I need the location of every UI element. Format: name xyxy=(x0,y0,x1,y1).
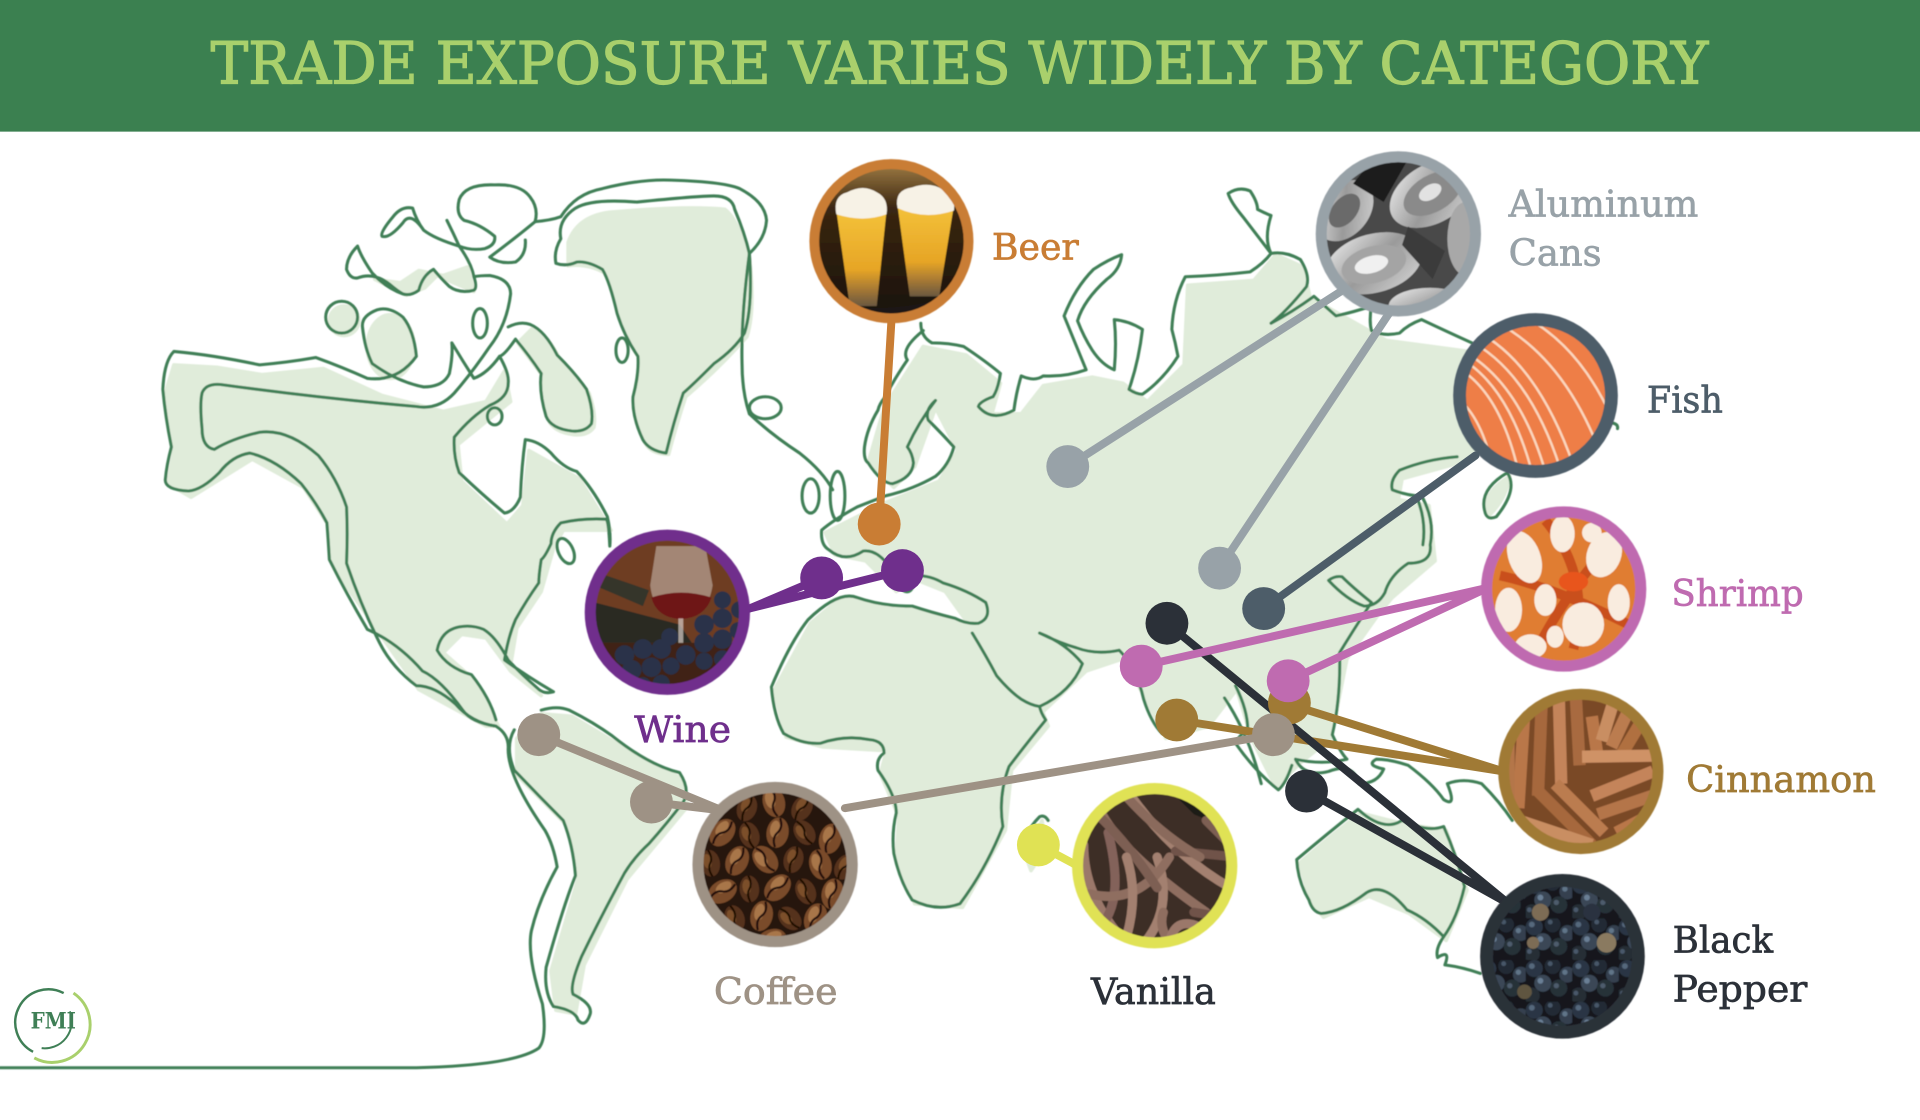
label: aluminum cans: Aluminum xyxy=(1508,183,1698,226)
coastline line xyxy=(0,180,1618,1068)
label: wine: Wine xyxy=(634,708,731,751)
label: black pepper xyxy=(1673,919,1808,1011)
label: black pepper: Pepper xyxy=(1673,968,1808,1011)
header banner xyxy=(0,0,1920,132)
label: cinnamon: Cinnamon xyxy=(1686,758,1876,801)
icon: black pepper xyxy=(1479,874,1646,1041)
label: aluminum cans: Cans xyxy=(1509,232,1602,275)
icon: vanilla xyxy=(1073,784,1237,949)
label: shrimp: Shrimp xyxy=(1671,572,1804,615)
icon: fish xyxy=(1453,313,1618,478)
label: beer: Beer xyxy=(992,226,1079,269)
icon: aluminum cans xyxy=(1315,150,1482,317)
label: vanilla: Vanilla xyxy=(1090,970,1216,1013)
logo: FMI: FMI xyxy=(31,1009,76,1035)
land fill xyxy=(165,208,1521,1014)
logo: FMI xyxy=(15,989,90,1062)
label: fish: Fish xyxy=(1647,379,1723,422)
label: black pepper: Black xyxy=(1673,919,1774,962)
icon: cinnamon xyxy=(1499,689,1663,853)
label: coffee: Coffee xyxy=(714,970,838,1013)
location dots xyxy=(517,445,1328,866)
title: TRADE EXPOSURE VARIES WIDELY BY CATEGORY xyxy=(211,30,1709,97)
icon: wine xyxy=(585,530,749,694)
icon: shrimp xyxy=(1482,507,1648,671)
icon: coffee xyxy=(693,784,860,956)
connector lines xyxy=(539,291,1509,904)
label: aluminum cans xyxy=(1508,183,1698,275)
world map xyxy=(0,180,1618,1068)
icon: beer xyxy=(808,159,975,331)
